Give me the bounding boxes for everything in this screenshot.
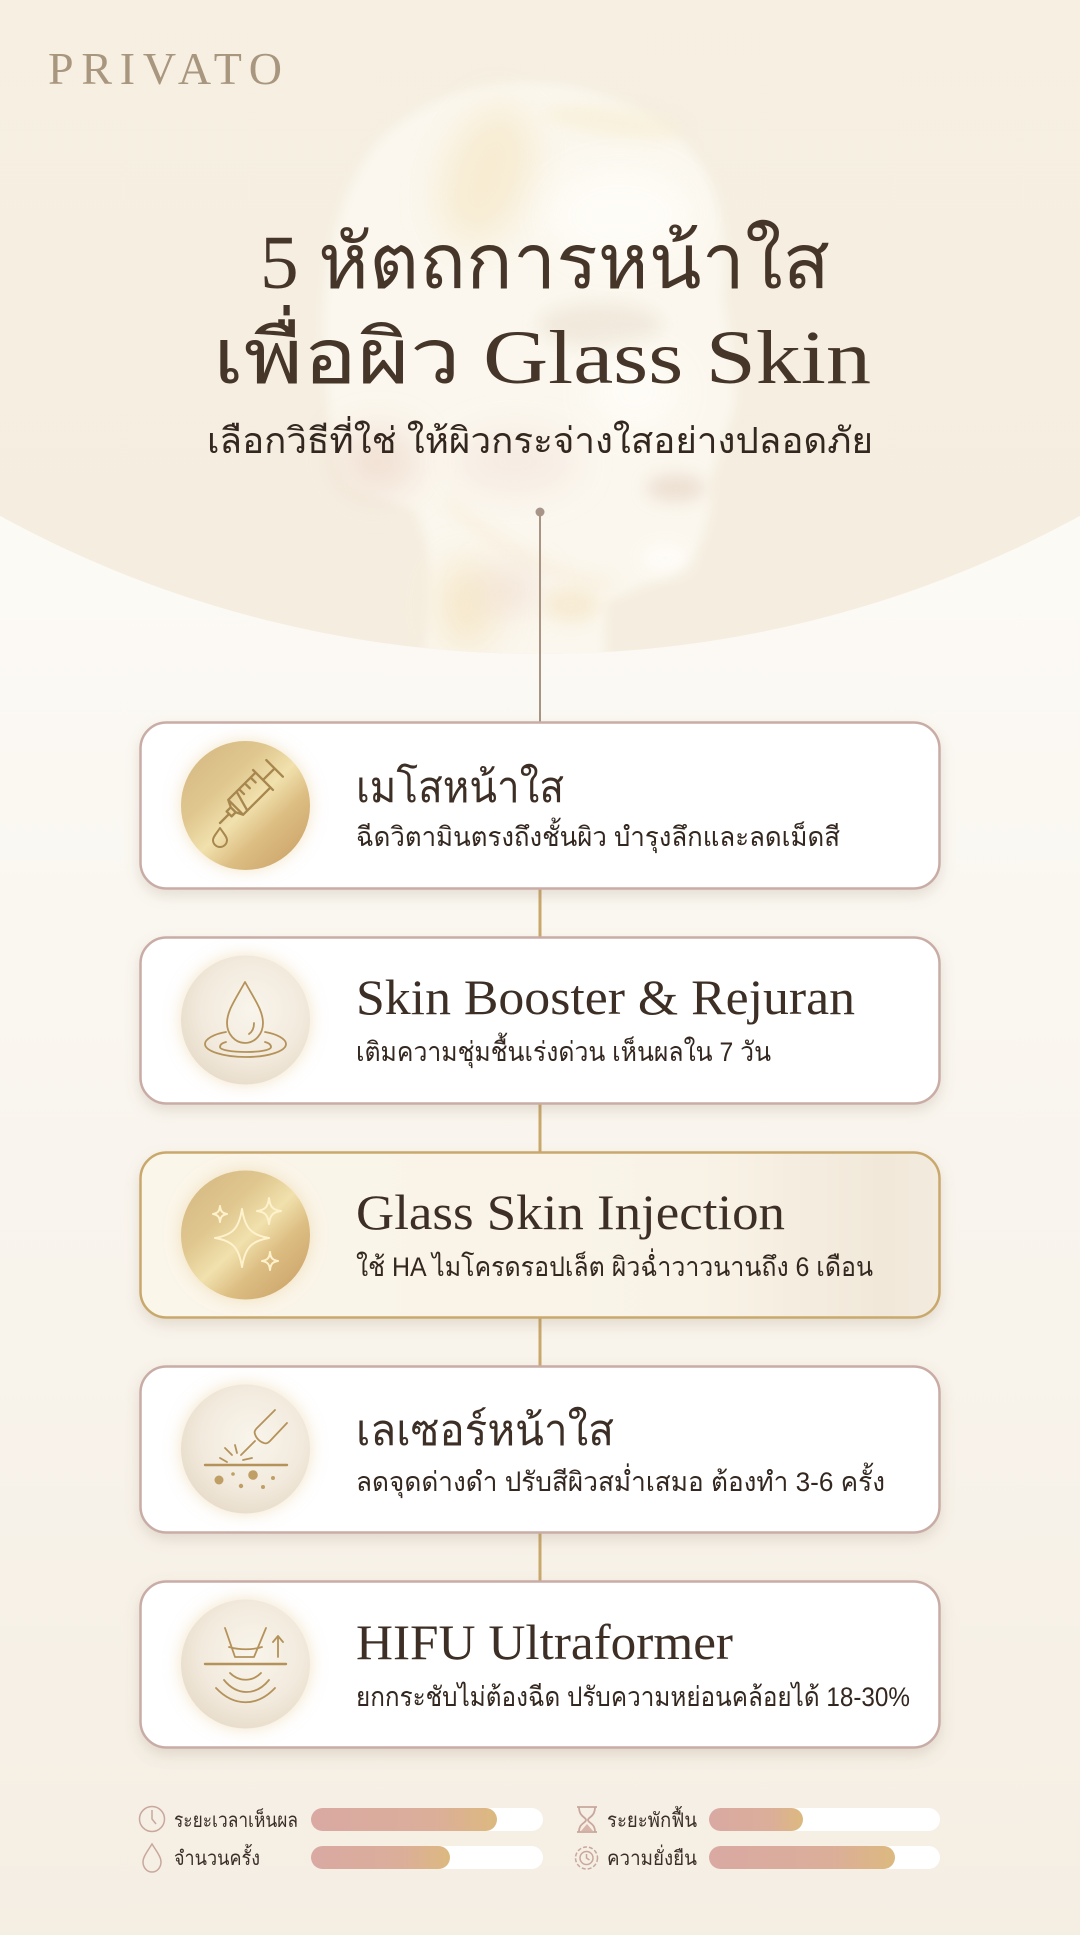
legend item: ระยะเวลาเห็นผล: ระยะเวลาเห็นผล (174, 1807, 298, 1832)
logo: PRIVATO: PRIVATO (48, 43, 282, 94)
legend item: ความยั่งยืน: ความยั่งยืน (607, 1844, 697, 1870)
card 3 text (356, 1184, 873, 1282)
card 5 text: HIFU Ultraformer (356, 1614, 733, 1670)
title: 5 หัตถการหน้าใส (260, 219, 830, 305)
legend item: ระยะพักฟื้น: ระยะพักฟื้น (607, 1806, 697, 1832)
card 4 text: เลเซอร์หน้าใส (356, 1406, 614, 1455)
card 3 text: Glass Skin Injection (356, 1184, 785, 1240)
card 5 text: ยกกระชับไม่ต้องฉีด ปรับความหย่อนคล้อยได้ 18-30% (356, 1682, 910, 1712)
card 4 text (356, 1406, 885, 1499)
connector line from face (536, 508, 544, 722)
icon: laser on skin (181, 1384, 310, 1514)
card 1 text: เมโสหน้าใส (356, 763, 564, 812)
title (213, 219, 871, 400)
icon: HIFU lift waves (181, 1600, 310, 1728)
card 2 text: Skin Booster & Rejuran (356, 969, 855, 1025)
card 1 text (356, 763, 840, 854)
gold connectors between cards (538, 889, 542, 1581)
legend item: ระยะพักฟื้น (577, 1806, 940, 1832)
card 2 text (356, 969, 855, 1069)
panel: card 2 Skin Booster & Rejuran (140, 938, 940, 1104)
legend item: จำนวนครั้ง (143, 1844, 543, 1872)
card 1 text: ฉีดวิตามินตรงถึงชั้นผิว บำรุงลึกและลดเม็ดสี (356, 817, 840, 854)
panel: card 5 HIFU Ultraformer (140, 1582, 940, 1748)
subtitle: เลือกวิธีที่ใช่ ให้ผิวกระจ่างใสอย่างปลอดภัย (207, 416, 873, 461)
header arc background (0, 0, 1080, 654)
icon: water drop with ripples (181, 956, 310, 1084)
icon: syringe in gold circle (181, 741, 310, 870)
card 2 text: เติมความชุ่มชื้นเร่งด่วน เห็นผลใน 7 วัน (356, 1032, 771, 1069)
panel: card 3 Glass Skin Injection (highlighted) (140, 1152, 940, 1318)
icon: sparkles in gold circle (181, 1170, 310, 1300)
legend item: จำนวนครั้ง: จำนวนครั้ง (174, 1844, 260, 1870)
card 5 text (356, 1614, 910, 1712)
face illustration (323, 83, 735, 680)
panel: card 4 เลเซอร์หน้าใส (140, 1366, 940, 1532)
card 4 text: ลดจุดด่างดำ ปรับสีผิวสม่ำเสมอ ต้องทำ 3-6 ครั้ง (356, 1462, 885, 1499)
legend (140, 1806, 940, 1872)
card 3 text: ใช้ HA ไมโครดรอปเล็ต ผิวฉ่ำวาวนานถึง 6 เดือน (356, 1248, 873, 1282)
legend item: ระยะเวลาเห็นผล (140, 1806, 543, 1832)
title: เพื่อผิว Glass Skin (213, 305, 871, 400)
legend item: ความยั่งยืน (576, 1844, 940, 1870)
panel: card 1 เมโสหน้าใส (140, 722, 940, 888)
